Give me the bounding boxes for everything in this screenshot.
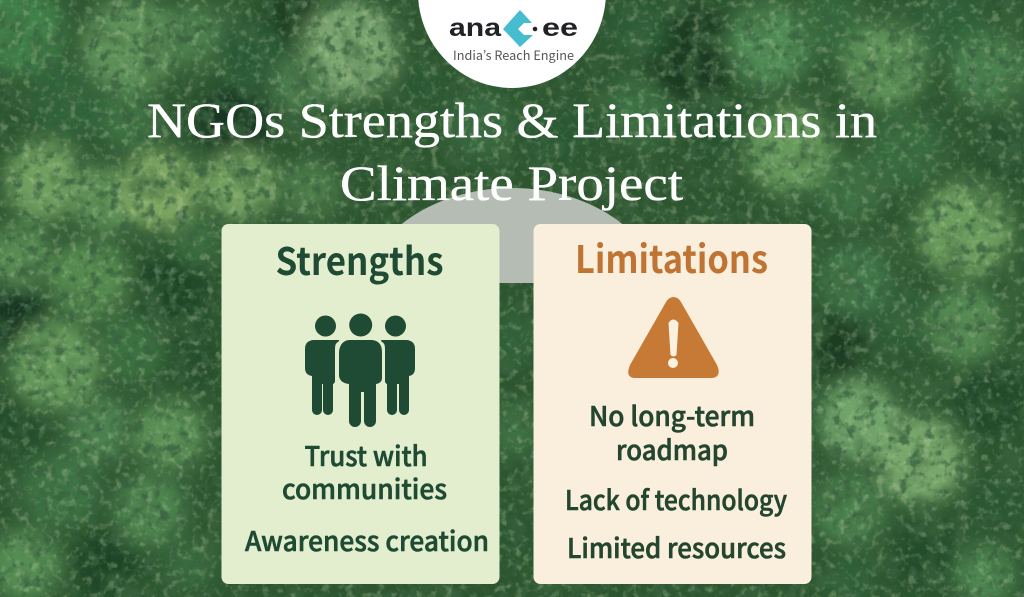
panel: strengths — [222, 224, 500, 584]
panel: limitations — [534, 224, 812, 584]
text: limited resources: Limited resources — [567, 527, 786, 566]
text: awareness creation: Awareness creation — [245, 520, 489, 559]
text: no long-term roadmap — [589, 395, 755, 468]
icon: group of people — [305, 314, 415, 427]
logo tagline: India’s Reach Engine — [453, 45, 574, 64]
text: no long-term roadmap: No long-term — [589, 395, 755, 434]
heading: strengths: Strengths — [276, 231, 444, 286]
logo wordmark — [449, 14, 578, 42]
text: no long-term roadmap: roadmap — [616, 429, 728, 468]
icon: warning triangle — [628, 297, 719, 378]
heading: limitations: Limitations — [575, 229, 768, 284]
logo badge — [418, 0, 606, 88]
text: lack of technology: Lack of technology — [565, 479, 787, 518]
logo diamond mark — [503, 10, 533, 47]
grey clearing arc behind the panels — [402, 188, 622, 283]
logo wordmark: ee — [542, 14, 578, 42]
title — [147, 92, 877, 211]
logo wordmark: ana — [449, 14, 502, 42]
text: trust with communities: communities — [282, 468, 447, 507]
text: trust with communities: Trust with — [304, 435, 428, 474]
title: Climate Project — [340, 155, 683, 211]
title: NGOs Strengths & Limitations in — [147, 92, 877, 148]
text: trust with communities — [282, 435, 447, 507]
